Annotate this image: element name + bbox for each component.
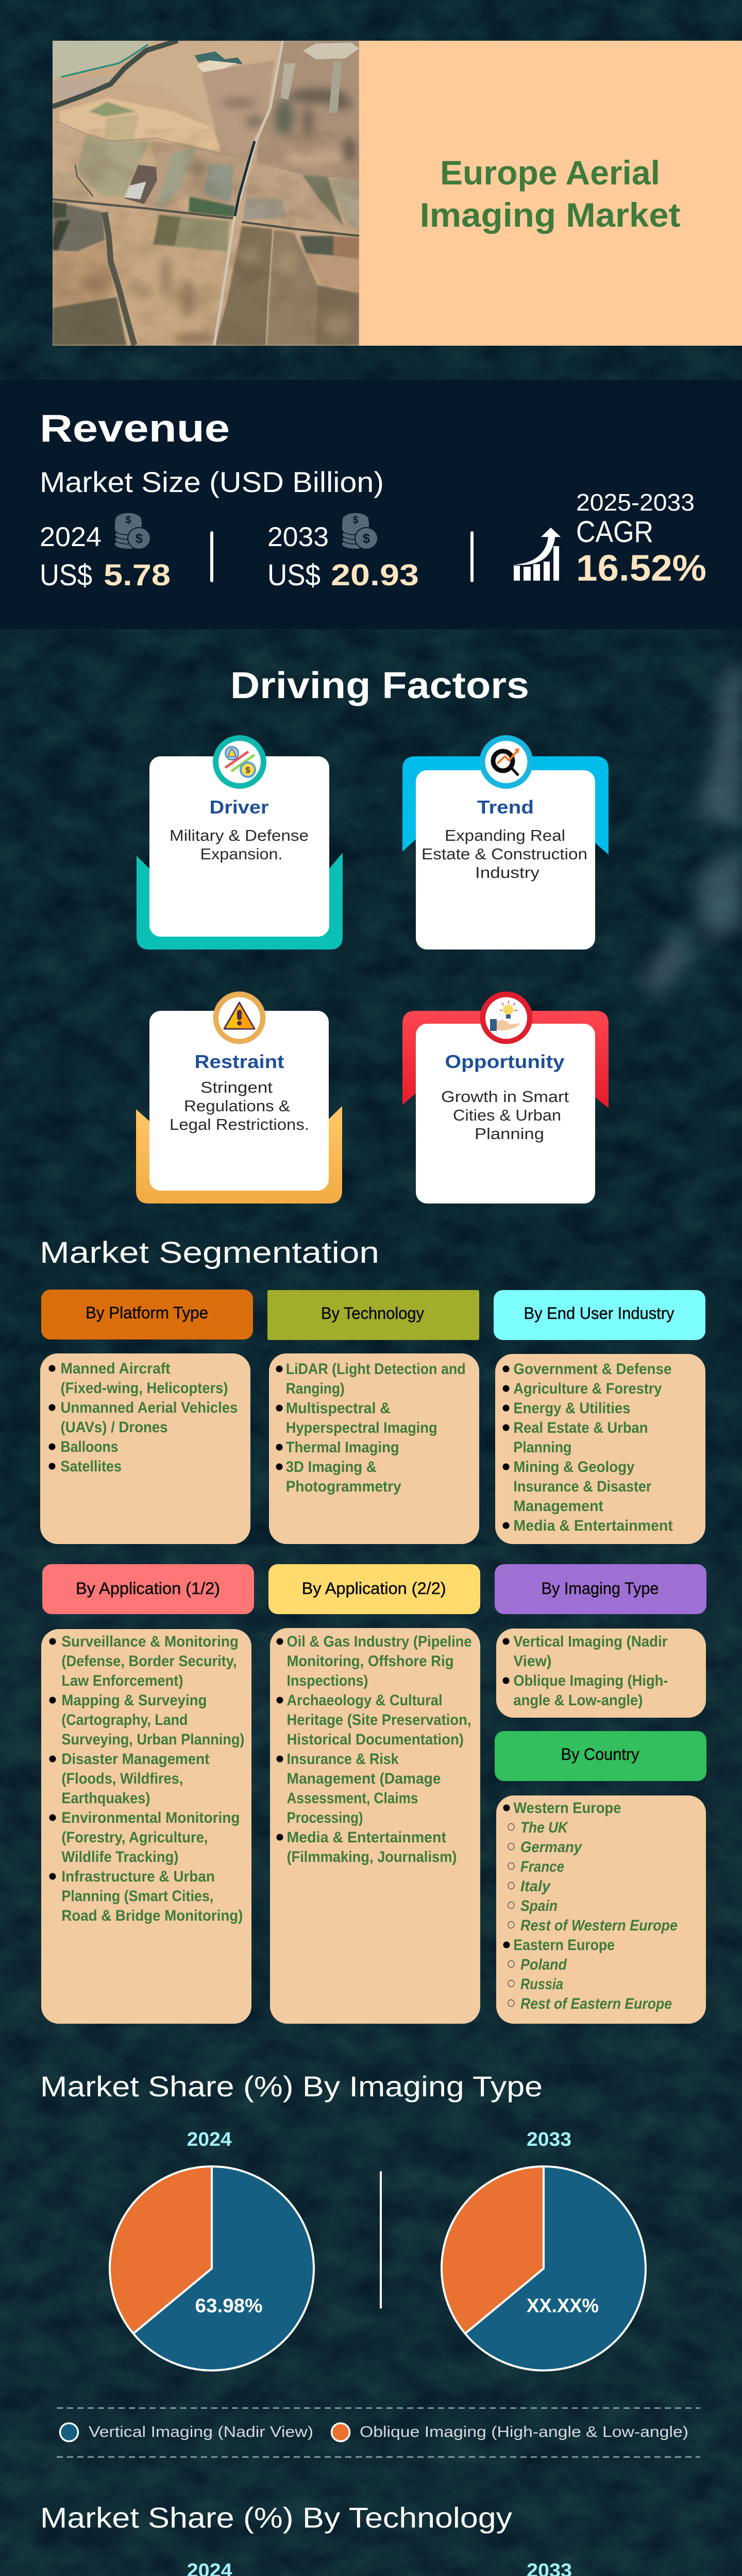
divider [380, 2171, 382, 2309]
trend text: Estate & Construction [421, 845, 587, 863]
segment: by technology: Hyperspectral Imaging [286, 1419, 437, 1436]
segment: by platform type: Satellites [61, 1458, 122, 1475]
segment: by technology [267, 1290, 479, 1544]
CAGR [576, 489, 706, 589]
segment: by country: France [520, 1858, 564, 1875]
segment: by end user industry: Insurance & Disaster [513, 1478, 652, 1495]
segment: by end user industry: Mining & Geology [513, 1459, 635, 1476]
segment: by application 1/2: Planning (Smart Cities, [61, 1888, 213, 1905]
revenue band [0, 380, 742, 629]
heading: market share by technology: Market Share (%) By Technology [40, 2501, 512, 2534]
segment: by country: Rest of Western Europe [520, 1917, 678, 1934]
segment: by application 1/2: (Cartography, Land [61, 1711, 188, 1728]
title: Europe Aerial [440, 154, 660, 192]
segment: by country: Eastern Europe [513, 1937, 615, 1954]
title: Imaging Market [420, 196, 681, 234]
segment: by technology: LiDAR (Light Detection and [286, 1361, 466, 1378]
segment: by end user industry: Energy & Utilities [513, 1400, 630, 1417]
opportunity text [441, 1051, 569, 1143]
icon: coins 2033: $ [352, 515, 359, 526]
segment: by application 2/2: Management (Damage [286, 1770, 441, 1787]
pie chart: imaging type 2024: 63.98% [195, 2295, 263, 2317]
segment: by application 1/2 [41, 1564, 254, 2024]
segment: by country: Italy [520, 1878, 551, 1895]
segment: by application 2/2: Monitoring, Offshore Rig [286, 1653, 453, 1670]
segment: by country: Spain [520, 1897, 558, 1914]
segment: by end user industry: Planning [513, 1439, 571, 1456]
segment: by country: Western Europe [513, 1800, 621, 1817]
opportunity text: Opportunity [445, 1051, 565, 1072]
segment: by application 2/2: Oil & Gas Industry (Pipeline [286, 1633, 472, 1650]
trend text: Expanding Real [445, 826, 565, 844]
segment: by imaging type: angle & Low-angle) [513, 1692, 643, 1709]
panel: opportunity [402, 991, 609, 1204]
icon: coins 2024 [115, 513, 150, 549]
segment: by application 1/2: Law Enforcement) [61, 1672, 183, 1689]
segment: by imaging type: Vertical Imaging (Nadir [513, 1633, 668, 1650]
segment: by technology: Thermal Imaging [286, 1439, 399, 1456]
segment: by application 2/2: Heritage (Site Preservation, [286, 1711, 471, 1728]
panel: restraint [136, 991, 342, 1204]
CAGR: CAGR [576, 515, 653, 549]
value 2033 [267, 522, 419, 592]
segment: by country: The UK [520, 1819, 569, 1836]
icon: trend [479, 735, 533, 789]
segment: by technology: Ranging) [286, 1380, 345, 1397]
segment: by application 2/2: Inspections) [286, 1672, 368, 1689]
value 2024: 2024 [40, 522, 102, 552]
segment: by application 1/2: (Floods, Wildfires, [61, 1770, 183, 1787]
driver text: Expansion. [200, 845, 282, 863]
trend text: Industry [475, 863, 540, 882]
market size label: Market Size (USD Billion) [40, 466, 384, 498]
heading: market share by imaging type: Market Share (%) By Imaging Type [40, 2070, 543, 2103]
segment: by imaging type: Oblique Imaging (High- [513, 1672, 668, 1689]
segment: by application 1/2: Surveillance & Monitoring [61, 1633, 239, 1650]
segment: by country: Germany [520, 1839, 582, 1856]
segment: by country: Rest of Eastern Europe [520, 1995, 672, 2012]
segment: by imaging type: By Imaging Type [541, 1579, 659, 1598]
opportunity text: Cities & Urban [453, 1106, 561, 1124]
legend: imaging type [57, 2408, 700, 2457]
segment: by application 1/2: Environmental Monitoring [61, 1809, 240, 1826]
divider [210, 531, 213, 582]
icon: coins 2024: $ [125, 515, 131, 526]
segment: by application 2/2: Media & Entertainment [286, 1829, 446, 1846]
segment: by platform type: Manned Aircraft [61, 1360, 170, 1377]
segment: by platform type: Balloons [61, 1438, 119, 1455]
opportunity text: Planning [475, 1125, 544, 1143]
segment: by platform type: Unmanned Aerial Vehicles [61, 1399, 238, 1416]
value 2033: US$ [267, 558, 321, 592]
year label 2033: 2033 [527, 2129, 571, 2150]
icon: coins 2033: $ [363, 531, 370, 546]
restraint text: Restraint [195, 1051, 284, 1072]
segment: by application 1/2: Surveying, Urban Planning) [61, 1731, 244, 1748]
icon: growth chart arrow [514, 527, 562, 581]
segment: by imaging type: View) [513, 1653, 551, 1670]
revenue heading: Revenue [40, 406, 230, 450]
legend: imaging type: Oblique Imaging (High-angle & Low-angle) [360, 2424, 688, 2441]
segment: by end user industry: Media & Entertainment [513, 1517, 673, 1534]
segment: by end user industry: Government & Defense [513, 1361, 671, 1378]
segment: by platform type: (Fixed-wing, Helicopters) [61, 1380, 228, 1397]
segment: by application 2/2: Processing) [286, 1809, 363, 1826]
segment: by technology: Photogrammetry [286, 1478, 401, 1495]
icon: driver [213, 735, 266, 789]
value 2033: 2033 [267, 522, 329, 552]
segment: by country [495, 1731, 706, 2024]
trend text: Trend [477, 796, 534, 818]
icon: opportunity [480, 991, 533, 1044]
segment: by application 1/2: Disaster Management [61, 1751, 209, 1768]
icon: coins 2024: $ [136, 531, 143, 546]
value 2033: 20.93 [331, 558, 419, 592]
icon: restraint [213, 991, 266, 1044]
pie chart: imaging type 2033 [442, 2166, 646, 2370]
panel: driver [137, 735, 343, 950]
segment: by application 2/2: Historical Documentation) [286, 1731, 464, 1748]
pie chart: imaging type 2024 [110, 2166, 314, 2370]
hero aerial photograph [52, 39, 367, 354]
segment: by application 1/2: Mapping & Surveying [61, 1692, 207, 1709]
icon: driver: $ [246, 766, 250, 775]
restraint text: Stringent [200, 1078, 273, 1096]
segment: by application 2/2: (Filmmaking, Journalism) [286, 1849, 457, 1866]
title panel [359, 41, 742, 346]
segment: by application 2/2 [268, 1564, 480, 2024]
trend text [421, 796, 587, 882]
restraint text: Regulations & [184, 1097, 290, 1115]
segment: by imaging type [495, 1564, 706, 1718]
segment: by application 1/2: (Defense, Border Security, [61, 1653, 237, 1670]
segment: by application 2/2: Assessment, Claims [286, 1790, 418, 1807]
segment: by end user industry: Agriculture & Forestry [513, 1380, 662, 1397]
segment: by application 1/2: Infrastructure & Urban [61, 1868, 215, 1885]
driver text [170, 796, 309, 863]
segment: by platform type [40, 1290, 253, 1544]
legend: imaging type: Vertical Imaging (Nadir View) [89, 2424, 313, 2441]
segment: by end user industry [494, 1290, 705, 1544]
CAGR: 16.52% [576, 548, 706, 589]
segment: by application 1/2: By Application (1/2) [76, 1579, 220, 1598]
segment: by technology: 3D Imaging & [286, 1459, 377, 1476]
restraint text: Legal Restrictions. [170, 1115, 309, 1133]
panel: trend [402, 735, 609, 950]
CAGR: 2025-2033 [576, 489, 695, 516]
opportunity text: Growth in Smart [441, 1088, 569, 1106]
segment: by application 1/2: Road & Bridge Monitoring) [61, 1907, 243, 1924]
segment: by platform type: (UAVs) / Drones [61, 1419, 168, 1436]
segment: by application 2/2: By Application (2/2) [302, 1579, 446, 1598]
driver text: Military & Defense [170, 826, 309, 844]
segment: by technology: Multispectral & [286, 1400, 391, 1417]
segment: by country: Russia [520, 1976, 563, 1993]
heading: driving factors: Driving Factors [230, 665, 529, 706]
segment: by country: Poland [520, 1956, 567, 1973]
segment: by country: By Country [561, 1745, 639, 1764]
restraint text [170, 1051, 309, 1133]
value 2024: 5.78 [104, 558, 171, 592]
segment: by application 2/2: Archaeology & Cultural [286, 1692, 442, 1709]
driver text: Driver [209, 796, 269, 818]
value 2024: US$ [40, 558, 92, 592]
title [420, 154, 681, 234]
icon: coins 2033 [342, 513, 378, 549]
segment: by application 1/2: Wildlife Tracking) [61, 1849, 178, 1866]
segment: by end user industry: Real Estate & Urban [513, 1419, 648, 1436]
segment: by application 2/2: Insurance & Risk [286, 1751, 399, 1768]
segment: by end user industry: Management [513, 1498, 603, 1515]
value 2024 [40, 522, 171, 592]
segment: by platform type: By Platform Type [86, 1303, 208, 1322]
pie chart: imaging type 2033: XX.XX% [527, 2295, 599, 2317]
segment: by technology: By Technology [321, 1304, 424, 1323]
divider [470, 531, 474, 582]
segment: by application 1/2: Earthquakes) [61, 1790, 150, 1807]
heading: market segmentation: Market Segmentation [40, 1236, 379, 1269]
year label 2024: 2024 [187, 2129, 232, 2150]
segment: by application 1/2: (Forestry, Agriculture, [61, 1829, 208, 1846]
segment: by end user industry: By End User Industry [524, 1304, 674, 1323]
